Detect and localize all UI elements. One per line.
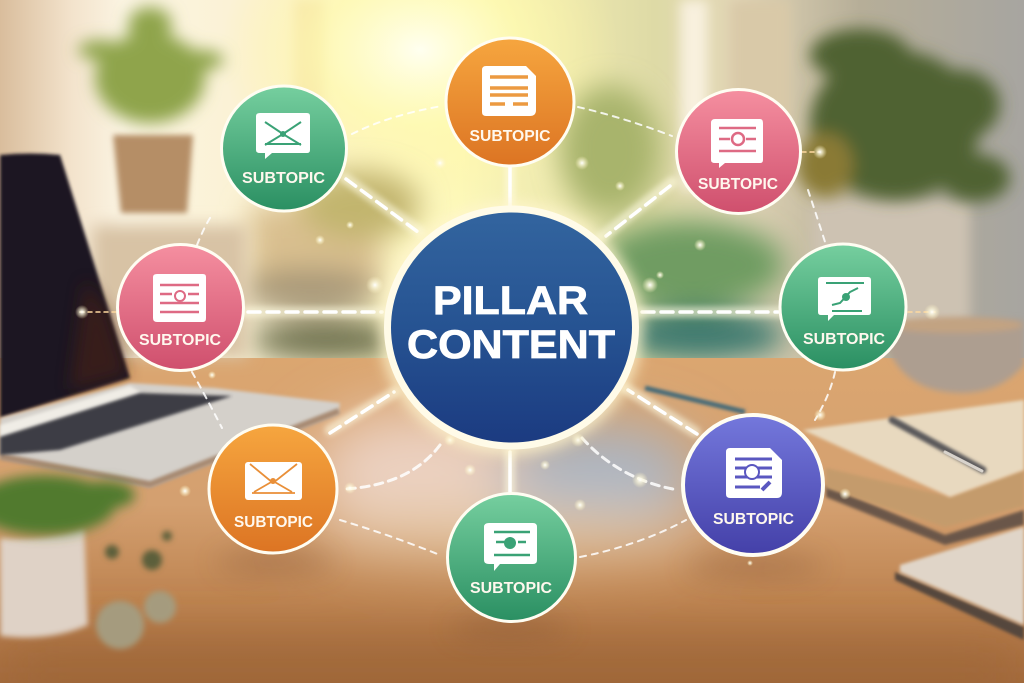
node: top right pink — [676, 90, 800, 214]
foliage — [78, 7, 224, 123]
node floor shadows — [215, 553, 825, 637]
outer dashed arcs — [192, 106, 835, 557]
node: bottom green: SUBTOPIC — [470, 580, 552, 597]
book page — [803, 400, 1024, 497]
node: left pink: SUBTOPIC — [139, 332, 221, 349]
laptop keyboard — [0, 393, 232, 455]
icon: speech card — [711, 119, 763, 168]
sunlight bloom — [220, 0, 620, 200]
pot — [113, 135, 193, 213]
icon: document with magnifier — [726, 448, 782, 498]
node: top orange — [446, 38, 574, 166]
leaves — [0, 475, 135, 535]
node: bottom green — [448, 494, 576, 622]
base front edge — [0, 408, 340, 488]
dashed spokes — [248, 179, 778, 434]
node: left pink — [118, 244, 244, 370]
desk light and shadow patches — [0, 410, 1024, 683]
node: top right pink: SUBTOPIC — [698, 176, 778, 193]
icon: chart message — [818, 277, 871, 321]
plant top right — [797, 29, 1010, 335]
node: right green — [780, 244, 906, 370]
sprigs — [105, 531, 172, 570]
node: bottom right purple — [683, 415, 823, 555]
outer short dashes — [80, 152, 935, 312]
sparkle points — [75, 145, 940, 566]
book cover — [826, 485, 1024, 545]
node: bottom left orange — [209, 425, 337, 553]
small pen on desk — [645, 388, 745, 412]
plant top left — [78, 7, 247, 358]
icon: message envelope — [256, 113, 310, 159]
laptop hinge strip — [0, 386, 142, 437]
node: top orange: SUBTOPIC — [470, 128, 550, 145]
icon: clipped note — [153, 274, 206, 322]
open notebook and pen — [645, 388, 1024, 545]
bowl right — [887, 316, 1024, 393]
pen — [892, 420, 983, 470]
central hub: pillar content — [361, 183, 661, 473]
blurred foliage behind the hub — [240, 85, 785, 361]
curtain and window frames — [295, 0, 790, 230]
node: top left green: SUBTOPIC — [242, 170, 325, 187]
node: bottom left orange: SUBTOPIC — [234, 514, 313, 531]
laptop base — [0, 383, 340, 487]
book edge — [826, 468, 1024, 527]
potted plant bottom left — [0, 475, 176, 649]
desk surface — [0, 358, 1024, 683]
icon: envelope — [245, 462, 302, 500]
spoke glow — [245, 165, 780, 495]
icon: chat card — [484, 523, 537, 571]
screen warm reflection — [70, 280, 128, 390]
vertical spokes — [508, 167, 512, 494]
icon: document — [482, 66, 536, 116]
central hub: pillar content: CONTENT — [407, 323, 615, 367]
connector lines: solid glowing spokes — [80, 106, 935, 557]
pot — [812, 200, 970, 335]
node: right green: SUBTOPIC — [803, 331, 885, 348]
node: top left green — [222, 86, 346, 211]
foliage — [797, 29, 1010, 202]
inner dashed arcs — [345, 438, 678, 490]
laptop screen — [0, 154, 130, 418]
background wall and window — [0, 0, 1024, 370]
pot — [0, 528, 88, 638]
node: bottom right purple: SUBTOPIC — [713, 511, 794, 528]
closed notebook bottom right — [895, 527, 1024, 640]
hub title: PILLAR — [433, 279, 588, 323]
laptop — [0, 154, 340, 488]
pods — [96, 591, 176, 649]
